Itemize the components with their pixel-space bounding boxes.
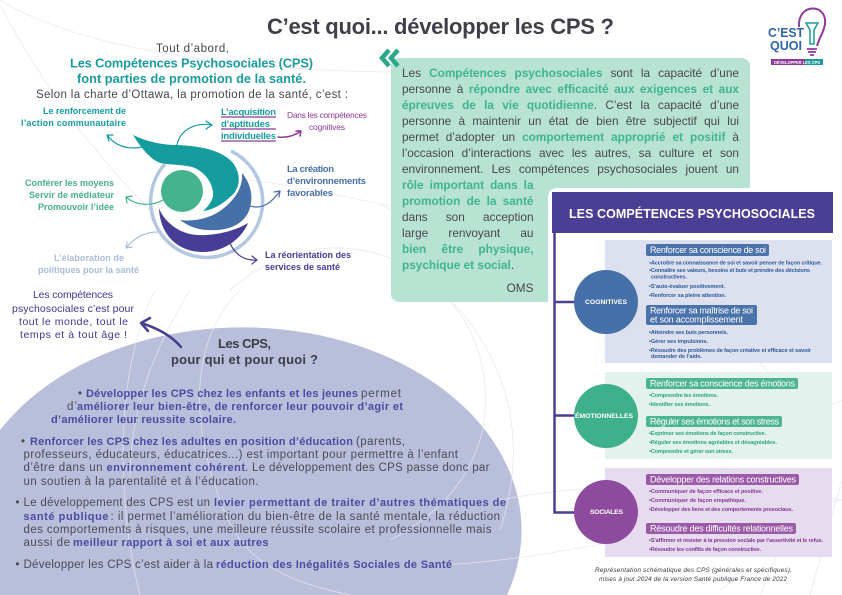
- caption: [595, 567, 792, 583]
- bullet: enfants et jeunes: d’: [67, 401, 77, 413]
- text block: OMS quote: l’occasion d’interactions avec les autres, sa culture et son: [402, 146, 739, 160]
- bullet: enfants et jeunes: •: [78, 388, 82, 400]
- text block: introduction: Tout d’abord,: [156, 43, 229, 55]
- bullet: adultes en position d'éducation: (parents,: [356, 436, 405, 448]
- label: conférer les moyens: Promouvoir l’idée: [38, 202, 114, 212]
- label: création d'environnements favorables: favorables: [287, 188, 333, 199]
- title: C’est quoi... développer les CPS ?: [267, 14, 614, 39]
- bullet: enfants et jeunes: Développer les CPS chez les enfants et les jeunes: [86, 388, 358, 400]
- panel header: LES COMPÉTENCES PSYCHOSOCIALES: [569, 206, 815, 221]
- text block: introduction: [36, 43, 348, 101]
- bullet: adultes en position d'éducation: [21, 436, 490, 488]
- text block: OMS quote: personne à maintenir un état de bien être subjectif qui lui: [402, 114, 739, 128]
- text block: OMS quote: personne à répondre avec efficacité aux exigences et aux: [402, 82, 739, 96]
- text block: OMS quote: permet d’adopter un comportement approprié et positif à: [402, 130, 739, 144]
- heading: les CPS pour qui et pour quoi: Les CPS,: [218, 336, 271, 351]
- label: création d'environnements favorables: d’environnements: [287, 176, 366, 187]
- label: acquisition d'aptitudes individuelles: [221, 107, 276, 142]
- bullet: levier santé publique: des comportements à risques, une meilleure réussite scolaire et professionnelle mais: [24, 524, 492, 536]
- label: renforcement de l'action communautaire: l’action communautaire: [21, 118, 126, 128]
- annotation: dans les compétences cognitives: [287, 110, 367, 132]
- bullet: enfants et jeunes: permet: [361, 388, 402, 400]
- card: cognitives: •S’auto-évaluer positivement.: [649, 284, 725, 290]
- card: émotionnelles: •Réguler ses émotions agréables et désagréables.: [649, 440, 777, 446]
- card: cognitives: [574, 240, 832, 363]
- bullet: adultes en position d'éducation: professeurs, éducateurs, éducatrices...) est important pour permettre à l’enfant: [24, 449, 459, 461]
- label: conférer les moyens: [25, 178, 114, 212]
- bullet: inégalités sociales: •: [16, 559, 20, 571]
- arrow: annotation to ellipse: [141, 318, 181, 347]
- panel: les compétences psychosociales: [548, 188, 842, 583]
- bullet: levier santé publique: : il permet l’amélioration du bien-être de la santé mentale, la réduction: [110, 511, 500, 523]
- bullet: adultes en position d'éducation: d’être dans un: [24, 462, 102, 474]
- label: création d'environnements favorables: [287, 164, 366, 199]
- bullet: adultes en position d'éducation: Renforcer les CPS chez les adultes en position d’éducation: [30, 436, 353, 448]
- card: cognitives: •Connaître ses valeurs, besoins et buts et prendre des décisions: [649, 268, 810, 274]
- card: émotionnelles: Réguler ses émotions et son stress: [650, 416, 780, 426]
- shape: purple swoosh: [159, 208, 248, 252]
- caption: mises à jour 2024 de la version Santé publique France de 2022: [599, 576, 787, 583]
- card: émotionnelles: •Comprendre et gérer son stress.: [649, 449, 733, 455]
- bullet: adultes en position d'éducation: . Le développement des CPS passe donc par: [245, 462, 490, 474]
- label: réorientation des services de santé: services de santé: [265, 262, 340, 272]
- card: cognitives: et son accomplissement: [650, 314, 743, 324]
- bullet: inégalités sociales: [16, 559, 452, 571]
- text block: OMS quote: promotion de la santé: [402, 194, 534, 208]
- text block: OMS quote: psychique et social.: [402, 258, 514, 272]
- bullet: levier santé publique: Le développement des CPS est un: [24, 497, 210, 509]
- card: cognitives: constructives.: [651, 274, 687, 280]
- text block: OMS quote: bien être physique,: [402, 242, 534, 256]
- label: conférer les moyens: Servir de médiateur: [29, 190, 114, 200]
- card: cognitives: •Accroître sa connaissance de soi et savoir penser de façon critique.: [649, 260, 822, 266]
- label: renforcement de l'action communautaire: [21, 106, 126, 128]
- bullet: adultes en position d'éducation: un soutien à la parentalité et à l’éducation.: [24, 476, 258, 488]
- card: sociales: •Communiquer de façon efficace et positive.: [649, 489, 763, 495]
- text block: OMS quote: épreuves de la vie quotidienne. C’est la capacité d’une: [402, 98, 739, 112]
- text block: OMS quote: large renvoyant au: [402, 226, 534, 240]
- shape: teal swoosh: [133, 135, 239, 211]
- bullet: levier santé publique: levier permettant de traiter d’autres thématiques de: [214, 497, 506, 509]
- card: émotionnelles: [574, 372, 832, 459]
- label: élaboration de politiques pour la santé: [38, 253, 139, 275]
- label: réorientation des services de santé: [265, 250, 351, 272]
- card: sociales: •S’affirmer et résister à la pression sociale par l’assertivité et le refus.: [649, 538, 823, 544]
- card: sociales: Développer des relations constructives: [650, 474, 796, 484]
- annotation: pour tout le monde: tout le monde, tout le: [19, 316, 128, 328]
- card: cognitives: Renforcer sa maîtrise de soi: [650, 306, 753, 316]
- panel: quote background: [391, 58, 750, 302]
- label: élaboration de politiques pour la santé: politiques pour la santé: [38, 265, 139, 275]
- text block: OMS quote: environnement. Les compétences psychosociales jouent un: [402, 162, 739, 176]
- circle: green centre: [161, 170, 203, 212]
- heading: les CPS pour qui et pour quoi: [171, 336, 318, 367]
- card: cognitives: •Résoudre des problèmes de façon créative et efficace et savoir: [649, 348, 812, 354]
- label: acquisition d'aptitudes individuelles: individuelles: [221, 131, 276, 142]
- card: cognitives: demander de l’aide.: [651, 354, 702, 360]
- shape: blue swoosh: [180, 173, 251, 230]
- card: sociales: Résoudre des difficultés relationnelles: [650, 524, 794, 534]
- card: émotionnelles: •Identifier ses émotions.: [649, 402, 710, 408]
- logo: C'est quoi: [768, 8, 825, 66]
- card: émotionnelles: ÉMOTIONNELLES: [575, 411, 633, 420]
- text block: OMS quote: dans son acception: [402, 210, 534, 224]
- text block: OMS quote: OMS: [507, 281, 534, 295]
- annotation: dans les compétences cognitives: Dans les compétences: [287, 110, 367, 120]
- logo: C'est quoi: QUOI: [770, 39, 802, 53]
- heading: les CPS pour qui et pour quoi: pour qui et pour quoi ?: [171, 352, 318, 367]
- card: cognitives: •Atteindre ses buts personnels.: [649, 330, 728, 336]
- panel: CPS pour qui et pour quoi (ellipse): [0, 327, 522, 595]
- label: conférer les moyens: Conférer les moyens: [25, 178, 114, 188]
- card: sociales: •Communiquer de façon empathique.: [649, 498, 746, 504]
- card: émotionnelles: •Comprendre les émotions.: [649, 393, 718, 399]
- logo: C'est quoi: DÉVELOPPER LES CPS: [774, 58, 821, 66]
- card: cognitives: Renforcer sa conscience de soi: [650, 245, 766, 255]
- bullet: levier santé publique: •: [16, 497, 20, 509]
- annotation: pour tout le monde: Les compétences: [33, 289, 113, 301]
- text block: OMS quote: Les Compétences psychosociales sont la capacité d’une: [402, 66, 739, 80]
- bullet: levier santé publique: aussi de: [24, 537, 70, 549]
- bullet: enfants et jeunes: améliorer leur bien-être, de renforcer leur pouvoir d’agir et: [77, 401, 403, 413]
- text block: OMS quote: [402, 66, 739, 295]
- icon: quotation marks: [382, 50, 398, 66]
- bullet: inégalités sociales: Développer les CPS c’est aider à la: [24, 559, 214, 571]
- bullet: levier santé publique: [16, 497, 506, 549]
- text block: introduction: Selon la charte d’Ottawa, la promotion de la santé, c’est :: [36, 89, 348, 101]
- annotation: dans les compétences cognitives: cognitives: [309, 122, 345, 132]
- annotation: pour tout le monde: [12, 289, 134, 341]
- card: sociales: •Développer des liens et des comportements prosociaux.: [649, 507, 793, 513]
- card: cognitives: COGNITIVES: [585, 299, 627, 306]
- caption: Représentation schématique des CPS (générales et spécifiques),: [595, 567, 792, 574]
- bullet: levier santé publique: meilleur rapport à soi et aux autres: [73, 537, 268, 549]
- label: acquisition d'aptitudes individuelles: L’acquisition: [221, 107, 276, 118]
- bullet: levier santé publique: santé publique: [24, 511, 108, 523]
- bullet: adultes en position d'éducation: environnement cohérent: [106, 462, 245, 474]
- card: cognitives: •Renforcer sa pleine attention.: [649, 293, 726, 299]
- diagram: charte d'Ottawa swirl: [133, 135, 263, 257]
- label: renforcement de l'action communautaire: Le renforcement de: [43, 106, 126, 116]
- annotation: pour tout le monde: psychosociales c’est pour: [12, 303, 134, 315]
- bullet: enfants et jeunes: [51, 388, 403, 426]
- panel header: [552, 192, 833, 233]
- label: création d'environnements favorables: La création: [287, 164, 334, 175]
- card: sociales: [574, 468, 832, 557]
- bullet: adultes en position d'éducation: •: [21, 436, 25, 448]
- annotation: pour tout le monde: temps et à tout âge !: [20, 329, 127, 341]
- card: cognitives: •Gérer ses impulsions.: [649, 339, 708, 345]
- card: sociales: •Résoudre les conflits de façon constructive.: [649, 547, 761, 553]
- arrows: diagram connectors: [107, 121, 301, 264]
- ring: [151, 151, 263, 257]
- bullet: inégalités sociales: réduction des Inégalités Sociales de Santé: [216, 559, 452, 571]
- bullet: enfants et jeunes: d’améliorer leur reussite scolaire.: [51, 414, 236, 426]
- label: acquisition d'aptitudes individuelles: d’aptitudes: [221, 119, 270, 130]
- text block: introduction: Les Compétences Psychosociales (CPS): [70, 56, 313, 70]
- label: réorientation des services de santé: La réorientation des: [265, 250, 351, 260]
- card: sociales: SOCIALES: [590, 509, 623, 516]
- label: élaboration de politiques pour la santé: L’élaboration de: [54, 253, 124, 263]
- text block: OMS quote: rôle important dans la: [402, 178, 534, 192]
- logo: C'est quoi: C’EST: [768, 26, 804, 40]
- card: émotionnelles: •Exprimer ses émotions de façon constructive.: [649, 431, 766, 437]
- text block: introduction: font parties de promotion de la santé.: [77, 71, 306, 86]
- card: émotionnelles: Renforcer sa conscience des émotions: [650, 378, 796, 388]
- text block: bullet list: [16, 388, 506, 571]
